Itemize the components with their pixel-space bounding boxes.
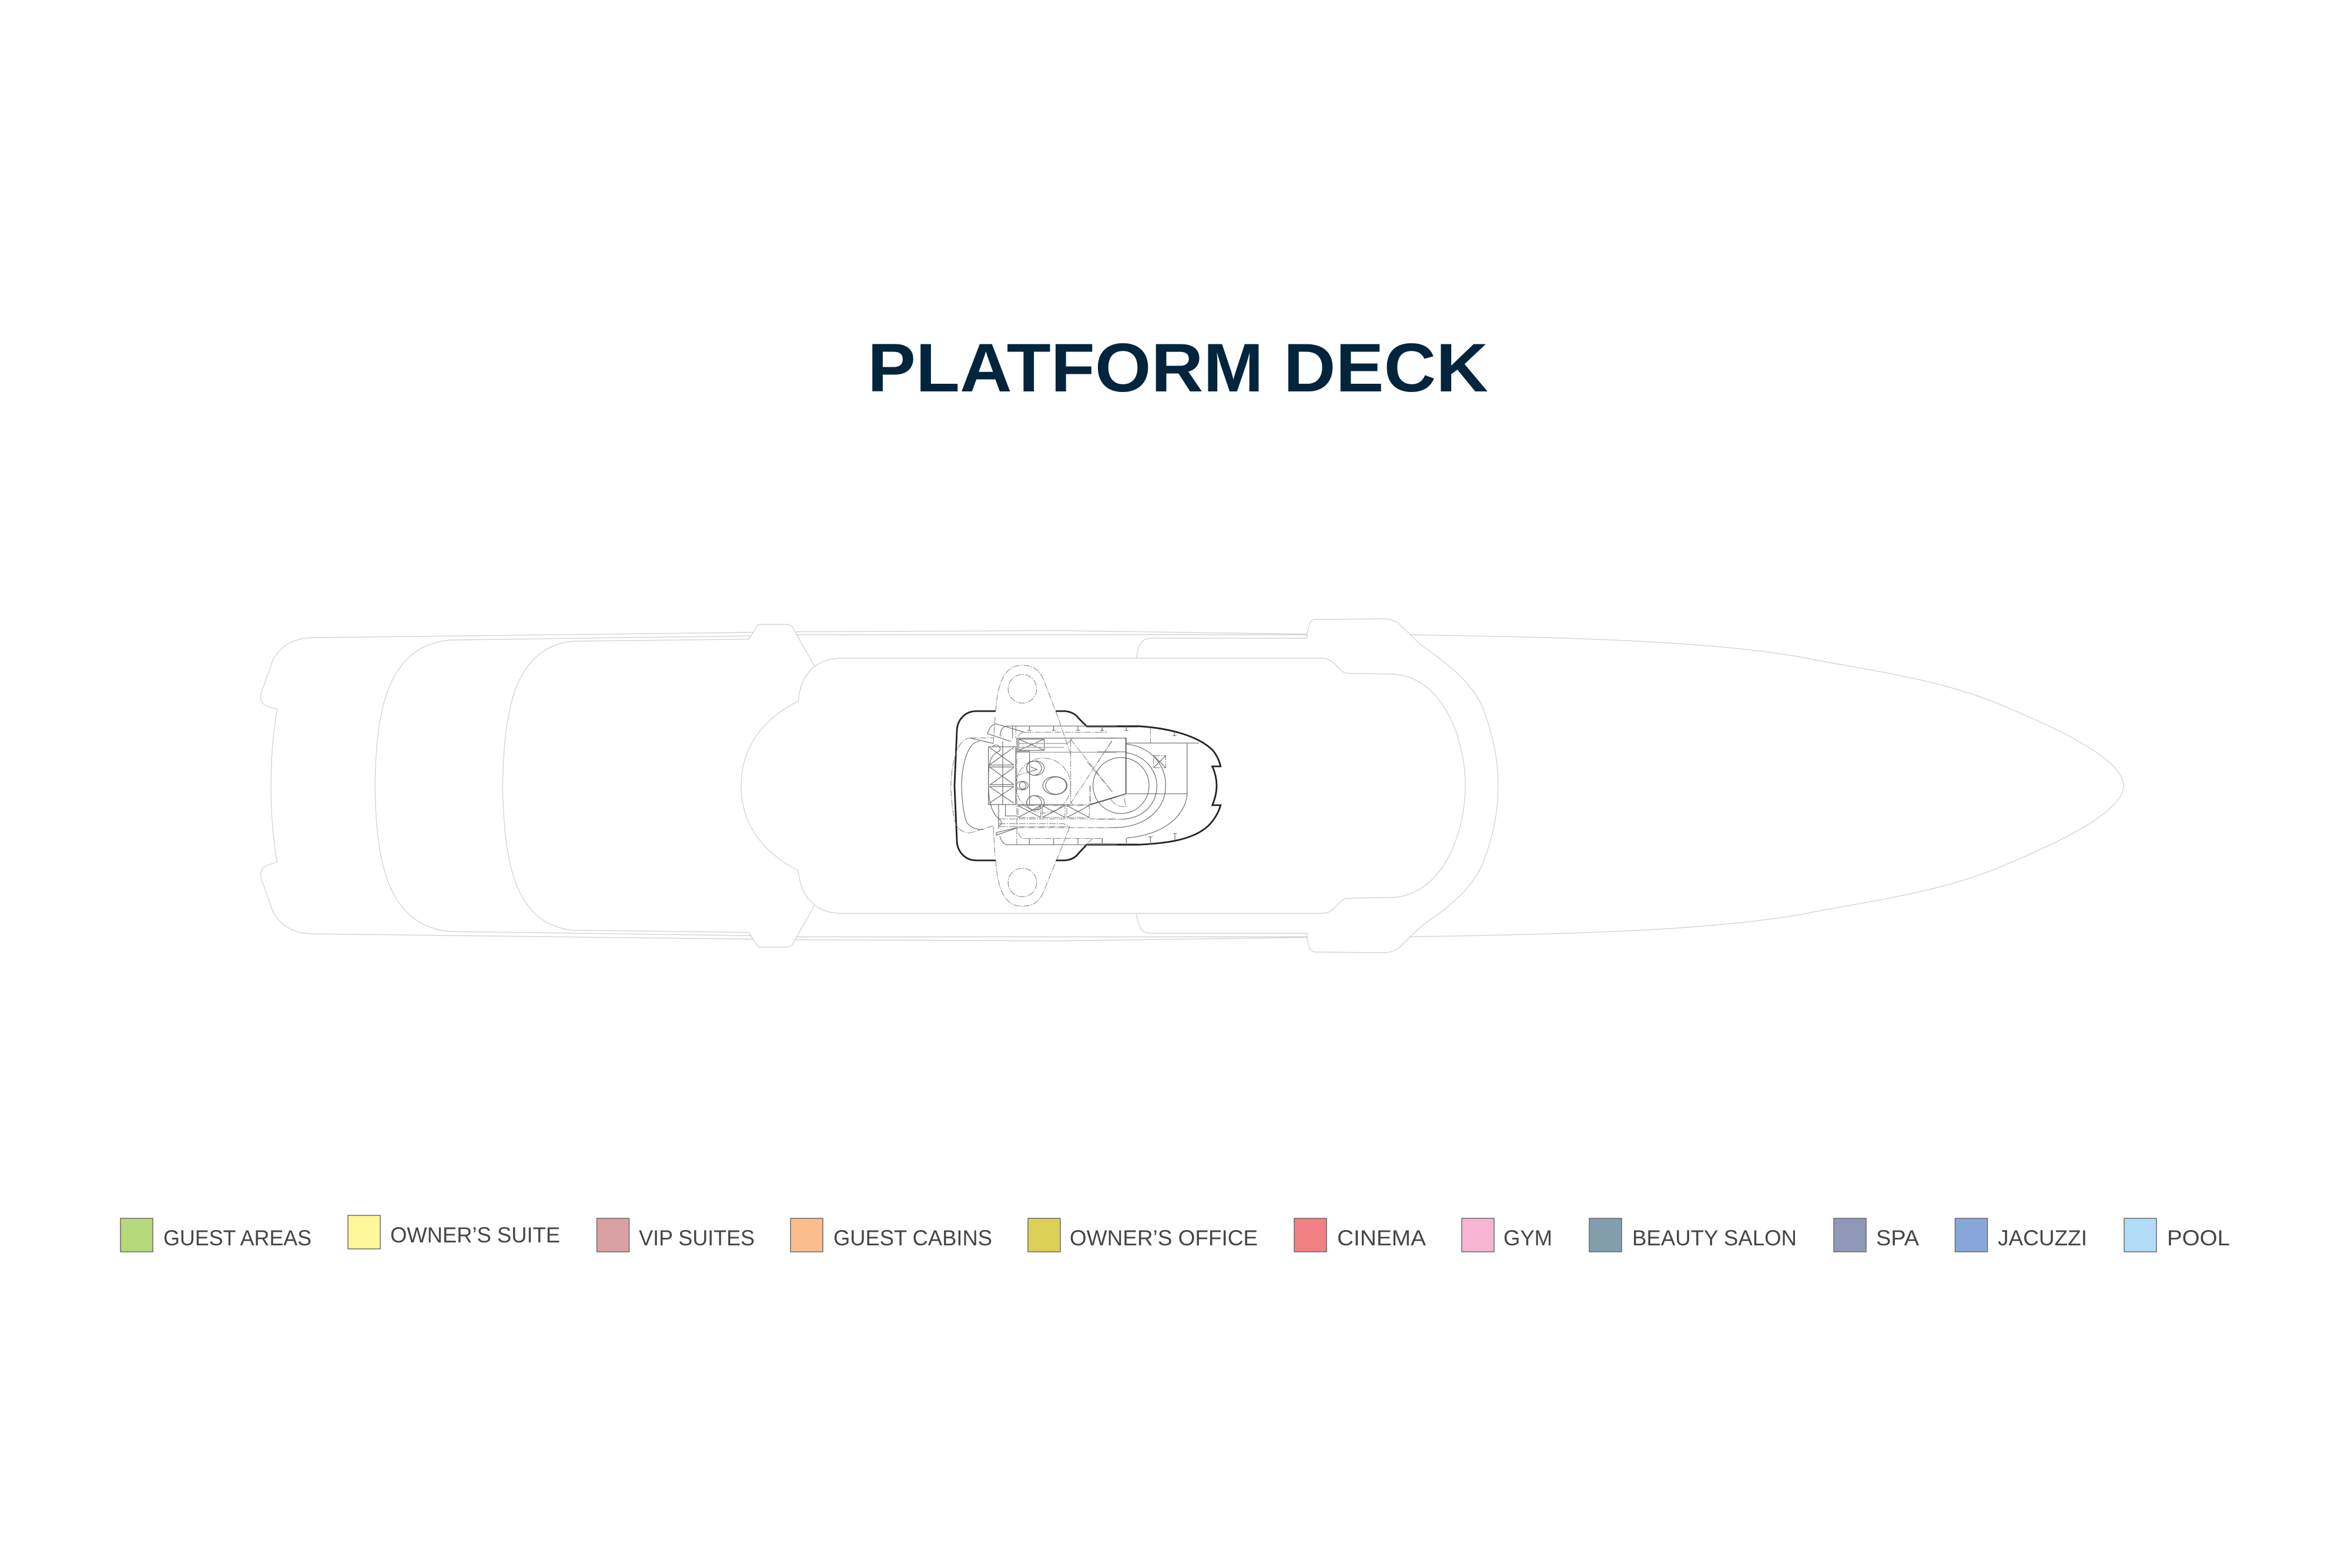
legend item: VIP suites	[597, 1218, 755, 1252]
legend item: pool: POOL	[2167, 1226, 2230, 1250]
grey service lines	[1017, 739, 1117, 752]
forward walls and pool rings	[1093, 726, 1199, 845]
legend item: beauty salon	[1589, 1218, 1797, 1252]
legend item: VIP suites: VIP SUITES	[639, 1226, 755, 1250]
legend item: guest areas	[120, 1218, 312, 1252]
legend item: jacuzzi: JACUZZI	[1998, 1226, 2087, 1250]
deck black outline	[955, 711, 1221, 860]
forward thick bulkhead	[1090, 738, 1126, 805]
legend item: beauty salon: BEAUTY SALON	[1632, 1226, 1797, 1250]
legend item: guest cabins: GUEST CABINS	[833, 1226, 992, 1250]
legend item: spa: SPA	[1876, 1226, 1919, 1250]
aft deck details	[951, 724, 1117, 845]
platform deck plan	[951, 665, 1221, 906]
legend item: guest areas: GUEST AREAS	[163, 1226, 312, 1250]
legend item: cinema: CINEMA	[1337, 1226, 1426, 1250]
legend item: gym	[1462, 1218, 1552, 1252]
title: PLATFORM DECK	[868, 329, 1488, 406]
dash-dot overhead lines	[951, 726, 1117, 845]
forward deck details	[1087, 726, 1199, 845]
legend item: spa	[1834, 1218, 1919, 1252]
legend item: gym: GYM	[1503, 1226, 1552, 1250]
yacht hull outline	[261, 619, 2124, 953]
legend item: guest cabins	[791, 1218, 992, 1252]
legend item: owner's suite: OWNER’S SUITE	[390, 1223, 560, 1247]
tender pylons with circles	[993, 665, 1071, 906]
legend item: jacuzzi	[1955, 1218, 2087, 1252]
legend	[120, 1215, 2230, 1252]
thick slanted bulkhead	[1090, 797, 1117, 805]
legend item: owner's office: OWNER’S OFFICE	[1070, 1226, 1258, 1250]
legend item: owner's suite	[348, 1215, 560, 1249]
legend item: pool	[2124, 1218, 2230, 1252]
legend item: cinema	[1294, 1218, 1426, 1252]
legend item: owner's office	[1028, 1218, 1258, 1252]
structural walls	[962, 724, 1117, 845]
forward dash-dot lines	[1087, 728, 1166, 843]
